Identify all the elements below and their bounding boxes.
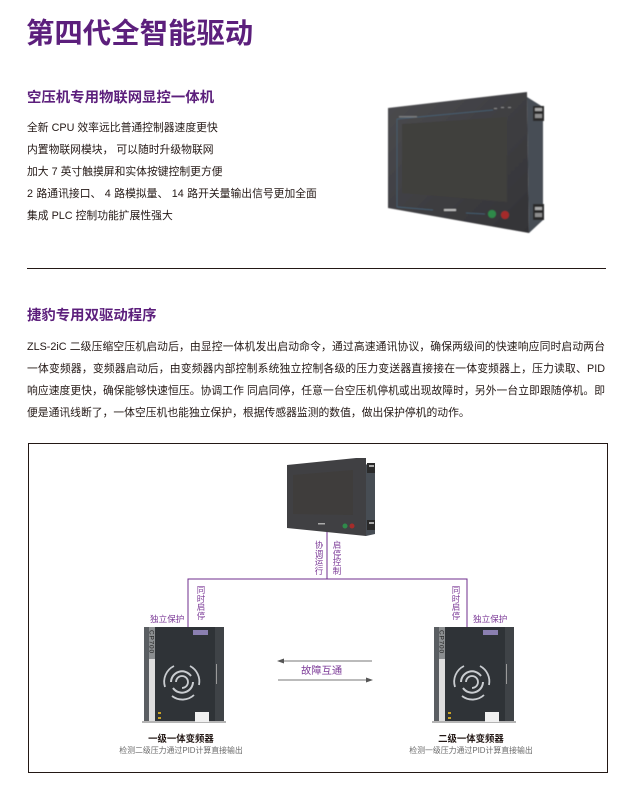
label: right independent protection: 独立保护 xyxy=(473,614,507,624)
paragraph: ZLS-2iC 二级压缩空压机启动后，由显控一体机发出启动命令，通过高速通讯协议，确保两级间的快速响应同时启动两台 xyxy=(27,341,605,353)
title: 第四代全智能驱动 xyxy=(26,18,253,50)
right inverter caption: 检测一级压力通过PID计算直接输出 xyxy=(409,746,533,755)
paragraph: 便是通讯线断了，一体空压机也能独立保护，根据传感器监测的数值，做出保护停机的动作。 xyxy=(27,407,470,419)
paragraph xyxy=(27,340,605,419)
right inverter caption xyxy=(409,733,533,755)
feature list: 内置物联网模块， 可以随时升级物联网 xyxy=(27,144,214,156)
label: left independent protection: 独立保护 xyxy=(150,614,184,624)
label: fault interconnection: 故障互通 xyxy=(301,666,342,677)
feature list: 加大 7 英寸触摸屏和实体按键控制更方便 xyxy=(27,166,223,178)
image: right inverter cabinet xyxy=(432,627,516,723)
feature list: 集成 PLC 控制功能扩展性强大 xyxy=(27,210,173,222)
feature list xyxy=(27,122,317,222)
divider line xyxy=(27,268,606,269)
label: start stop control: 启停控制 xyxy=(333,540,341,576)
left inverter caption xyxy=(119,733,243,755)
feature list: 全新 CPU 效率远比普通控制器速度更快 xyxy=(27,122,218,134)
panel: HMI section xyxy=(27,90,606,269)
label: left simultaneous start stop: 同时启停 xyxy=(197,585,205,621)
panel: system diagram xyxy=(28,443,608,773)
image: HMI touch panel xyxy=(387,91,545,234)
heading: dual drive: 捷豹专用双驱动程序 xyxy=(27,308,157,324)
paragraph: 响应速度更快，确保能够快速恒压。协调工作 同启同停，任意一台空压机停机或出现故障时，另外一台立即跟随停机。即 xyxy=(27,385,605,397)
label: right simultaneous start stop: 同时启停 xyxy=(452,585,460,621)
left inverter caption: 一级一体变频器 xyxy=(148,733,214,744)
image: left inverter cabinet xyxy=(142,627,226,723)
label: coordinated operation: 协调运行 xyxy=(315,540,323,576)
feature list: 2 路通讯接口、 4 路模拟量、 14 路开关量输出信号更加全面 xyxy=(27,188,317,200)
left inverter caption: 检测二级压力通过PID计算直接输出 xyxy=(119,746,243,755)
right inverter caption: 二级一体变频器 xyxy=(438,733,504,744)
paragraph: 一体变频器，变频器启动后，由变频器内部控制系统独立控制各级的压力变送器直接接在一体变频器上，压力读取、PID xyxy=(27,363,605,375)
heading: HMI: 空压机专用物联网显控一体机 xyxy=(27,90,214,106)
panel: dual drive section xyxy=(27,308,605,419)
image: touch panel in diagram xyxy=(287,458,375,536)
